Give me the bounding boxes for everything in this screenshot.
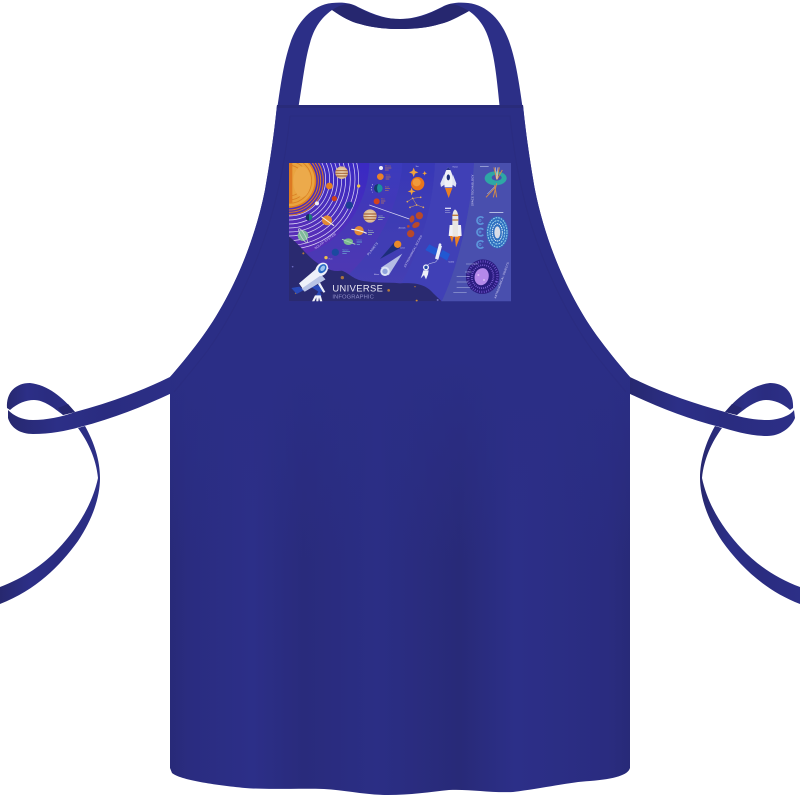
star and orange body: Star bbox=[416, 165, 419, 168]
panel background bands bbox=[289, 163, 511, 301]
meteor bbox=[374, 254, 402, 276]
planet captions: Earth bbox=[385, 185, 389, 188]
galaxy callout lines bbox=[453, 264, 478, 293]
purple galaxy bbox=[466, 259, 500, 294]
planet captions: Pluto bbox=[329, 257, 333, 260]
constellation bbox=[407, 197, 424, 208]
planet captions: Neptune bbox=[342, 248, 349, 251]
pointer line bbox=[369, 205, 409, 219]
star and orange body bbox=[408, 165, 427, 195]
asteroids: Asteroids bbox=[399, 226, 406, 229]
astronomical bodies label: ASTRONOMICAL BODIES bbox=[403, 234, 423, 268]
solar system label: SOLAR SYSTEM bbox=[314, 232, 337, 250]
planet captions bbox=[329, 166, 391, 260]
astronomical objects label: ASTRONOMICAL OBJECTS bbox=[493, 262, 510, 299]
planet captions: Venus bbox=[386, 175, 390, 177]
right waist tie bbox=[628, 376, 800, 604]
orbit rings bbox=[289, 163, 359, 248]
space technology label: SPACE TECHNOLOGY bbox=[471, 174, 475, 206]
meteor: Meteor bbox=[374, 273, 380, 276]
planets column bbox=[324, 166, 384, 259]
neck strap bbox=[277, 3, 523, 110]
title: UNIVERSE bbox=[332, 283, 383, 293]
dark starfield ground bbox=[289, 237, 442, 302]
printed universe infographic bbox=[289, 163, 511, 302]
apron body bbox=[170, 105, 630, 795]
planet captions: Saturn bbox=[368, 229, 373, 232]
rocket bbox=[440, 165, 458, 198]
asteroids bbox=[399, 212, 423, 237]
subtitle: INFOGRAPHIC bbox=[332, 294, 374, 300]
left waist tie bbox=[0, 376, 172, 604]
satellite: Satellite bbox=[448, 261, 454, 264]
planets label: PLANETS bbox=[366, 241, 379, 256]
sun bbox=[289, 163, 324, 216]
pulsar icons bbox=[477, 217, 483, 248]
planet captions: Jupiter bbox=[378, 214, 383, 217]
telescope bbox=[292, 262, 328, 302]
satellite bbox=[425, 243, 454, 264]
comet bbox=[380, 241, 405, 259]
launch vehicle bbox=[445, 208, 462, 247]
comet: Comet bbox=[400, 247, 405, 250]
rocket: Rocket bbox=[453, 165, 458, 168]
astronaut bbox=[421, 258, 437, 279]
spiral galaxy bbox=[486, 212, 508, 248]
planet captions: Mars bbox=[381, 199, 385, 201]
planet captions: Mercury bbox=[385, 166, 391, 168]
black hole bbox=[480, 166, 507, 197]
solar system planets bbox=[297, 166, 360, 244]
planet captions: Uranus bbox=[357, 240, 362, 242]
